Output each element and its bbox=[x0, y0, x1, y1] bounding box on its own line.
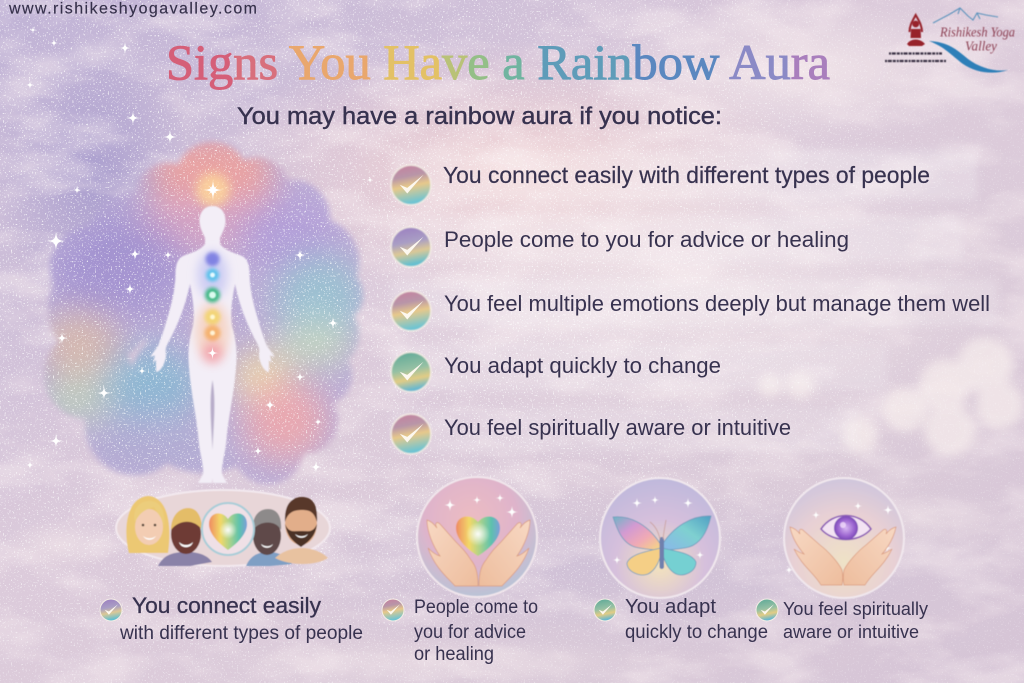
item 2: People come to you for advice or healing bbox=[444, 227, 849, 252]
aura star field bbox=[44, 142, 363, 484]
item 4 bbox=[391, 352, 721, 392]
subtitle: You may have a rainbow aura if you notice: bbox=[237, 103, 722, 130]
chakras bbox=[202, 252, 222, 363]
logo: Rishikesh Yoga Valley bbox=[885, 8, 1015, 73]
caption: advice: you for advice bbox=[414, 622, 526, 643]
checklist bbox=[391, 162, 990, 454]
right hand bbox=[843, 527, 896, 585]
logo meditating figure bbox=[907, 15, 925, 46]
caption: advice: People come to bbox=[414, 597, 538, 618]
item 5 bbox=[391, 414, 791, 454]
left hand bbox=[427, 520, 478, 586]
item 2 bbox=[391, 227, 849, 267]
left hand bbox=[790, 527, 843, 585]
caption: spiritual: You feel spiritually bbox=[783, 598, 929, 619]
logo name bbox=[939, 26, 1015, 54]
woman with blonde hair bbox=[126, 496, 169, 553]
item 1 bbox=[391, 162, 930, 205]
caption: adapt: You adapt bbox=[625, 595, 716, 618]
caption: connect: with different types of people bbox=[119, 622, 363, 644]
icon: diverse people around a heart bbox=[116, 490, 330, 566]
aura star bursts bbox=[46, 173, 339, 473]
butterfly wings bbox=[613, 516, 711, 575]
background sparkles bbox=[26, 26, 374, 470]
logo mountains bbox=[933, 8, 998, 23]
item 3: You feel multiple emotions deeply but manage them well bbox=[444, 291, 990, 316]
cloud bank at right bbox=[758, 337, 1024, 456]
caption: adapt bbox=[594, 595, 768, 643]
butterfly body and antennae bbox=[650, 520, 666, 569]
item 1: You connect easily with different types of people bbox=[443, 162, 930, 188]
aura illustration with chakra figure bbox=[42, 139, 366, 486]
icon: rainbow butterfly bbox=[600, 478, 720, 598]
icon: hands holding a heart bbox=[417, 477, 537, 597]
third eye bbox=[821, 516, 871, 540]
website url: www.rishikeshyogavalley.com bbox=[8, 0, 257, 18]
caption: spiritual: aware or intuitive bbox=[783, 621, 919, 642]
caption: connect bbox=[100, 593, 363, 644]
rainbow heart bubble bbox=[202, 503, 254, 555]
man with short light hair bbox=[158, 508, 212, 566]
item 5: You feel spiritually aware or intuitive bbox=[444, 415, 791, 440]
caption: spiritual bbox=[756, 598, 929, 642]
translucent bands behind the list bbox=[392, 150, 997, 452]
logo name: Rishikesh Yoga bbox=[939, 26, 1015, 40]
aura cloud bbox=[42, 139, 366, 486]
caption: adapt: quickly to change bbox=[625, 622, 768, 643]
item 3 bbox=[391, 291, 990, 331]
caption: advice: or healing bbox=[414, 644, 494, 665]
icon: hands and third eye bbox=[784, 478, 904, 598]
logo motto lines bbox=[885, 54, 946, 61]
caption: connect: You connect easily bbox=[132, 593, 321, 618]
logo name: Valley bbox=[965, 40, 998, 54]
title: Signs You Have a Rainbow Aura bbox=[166, 34, 830, 90]
man with dark skin bbox=[246, 509, 292, 566]
man with beard bbox=[275, 497, 328, 564]
human silhouette bbox=[150, 206, 275, 483]
logo river swoosh bbox=[929, 41, 1008, 73]
caption: advice bbox=[382, 597, 538, 665]
item 4: You adapt quickly to change bbox=[444, 353, 721, 378]
body glow bbox=[196, 251, 230, 362]
right hand bbox=[479, 520, 530, 586]
